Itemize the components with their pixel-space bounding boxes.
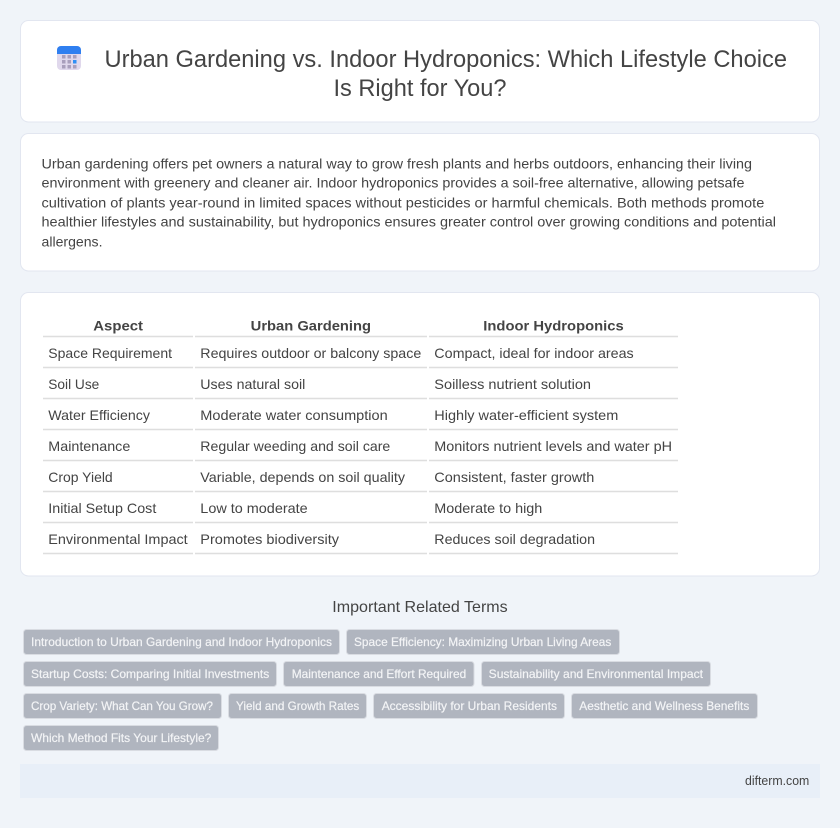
row: initial setup cost: Moderate to high [434,500,542,516]
tag [24,630,340,654]
table header row [93,318,624,334]
row: space requirement [48,345,634,361]
tag [24,662,276,686]
row: crop yield: Consistent, faster growth [434,469,594,485]
text block: introduction paragraph [42,155,776,249]
header panel [20,20,820,122]
icon: calendar [57,46,81,70]
text block: introduction paragraph: Urban gardening offers pet owners a natural way to grow fresh plants and herbs outdoors, enhancing their living [42,155,752,171]
table header row: Indoor Hydroponics [483,318,624,334]
heading: important related terms: Important Related Terms [332,599,508,616]
tag [228,694,366,718]
row: maintenance: Monitors nutrient levels and water pH [434,438,672,454]
tag [24,694,222,718]
row: environmental impact [48,531,595,547]
tag [572,694,758,718]
title: Is Right for You? [334,75,506,102]
row: soil use: Soil Use [48,376,99,392]
panel: comparison table [20,292,820,576]
panel: introduction [20,134,820,271]
row: space requirement: Compact, ideal for indoor areas [434,345,634,361]
tag: Accessibility for Urban Residents [382,699,557,713]
row: initial setup cost: Low to moderate [200,500,308,516]
row: maintenance [48,438,672,454]
row: soil use [48,376,591,392]
tag: Introduction to Urban Gardening and Indoor Hydroponics [31,635,332,649]
related terms tags [24,630,758,750]
tag: Aesthetic and Wellness Benefits [579,699,749,713]
tag: Startup Costs: Comparing Initial Investments [31,667,269,681]
tag: Yield and Growth Rates [236,699,359,713]
tag [284,662,474,686]
row: environmental impact: Environmental Impact [48,531,188,547]
table header row: Urban Gardening [251,318,371,334]
row: crop yield: Crop Yield [48,469,113,485]
text block: introduction paragraph: cultivation of plants year-round in limited spaces without pesticides or harmful chemicals. Both methods promote [42,194,765,210]
text block: introduction paragraph: environment with greenery and cleaner air. Indoor hydroponics provides a soil-free alternative, allowing petsafe [42,174,745,190]
row: maintenance: Maintenance [48,438,131,454]
tag: Sustainability and Environmental Impact [489,667,704,681]
text block: introduction paragraph: healthier lifestyles and sustainability, but hydroponics ensures greater control over growing conditions and potential [42,214,776,230]
title: Urban Gardening vs. Indoor Hydroponics: Which Lifestyle Choice [104,46,787,73]
row: maintenance: Regular weeding and soil care [200,438,391,454]
tag [374,694,564,718]
row: initial setup cost: Initial Setup Cost [48,500,156,516]
tag [346,630,620,654]
text block: introduction paragraph: allergens. [42,233,102,249]
row: water efficiency: Water Efficiency [48,407,150,423]
footer source text: difterm.com [745,773,809,788]
tag: Space Efficiency: Maximizing Urban Living Areas [354,635,611,649]
row: crop yield: Variable, depends on soil quality [200,469,405,485]
row: environmental impact: Reduces soil degradation [434,531,595,547]
row: initial setup cost [48,500,542,516]
tag: Which Method Fits Your Lifestyle? [31,731,212,745]
footer bar [20,764,820,798]
table grid lines [43,336,678,554]
row: soil use: Soilless nutrient solution [434,376,591,392]
tag: Maintenance and Effort Required [292,667,466,681]
row: space requirement: Space Requirement [48,345,172,361]
tag: Crop Variety: What Can You Grow? [31,699,213,713]
row: space requirement: Requires outdoor or balcony space [200,345,422,361]
row: crop yield [48,469,594,485]
row: soil use: Uses natural soil [200,376,305,392]
row: environmental impact: Promotes biodiversity [200,531,339,547]
row: water efficiency: Moderate water consumption [200,407,388,423]
title [104,46,787,102]
row: water efficiency [48,407,618,423]
tag [482,662,710,686]
table header row: Aspect [93,318,143,334]
tag [24,726,218,750]
row: water efficiency: Highly water-efficient system [434,407,618,423]
